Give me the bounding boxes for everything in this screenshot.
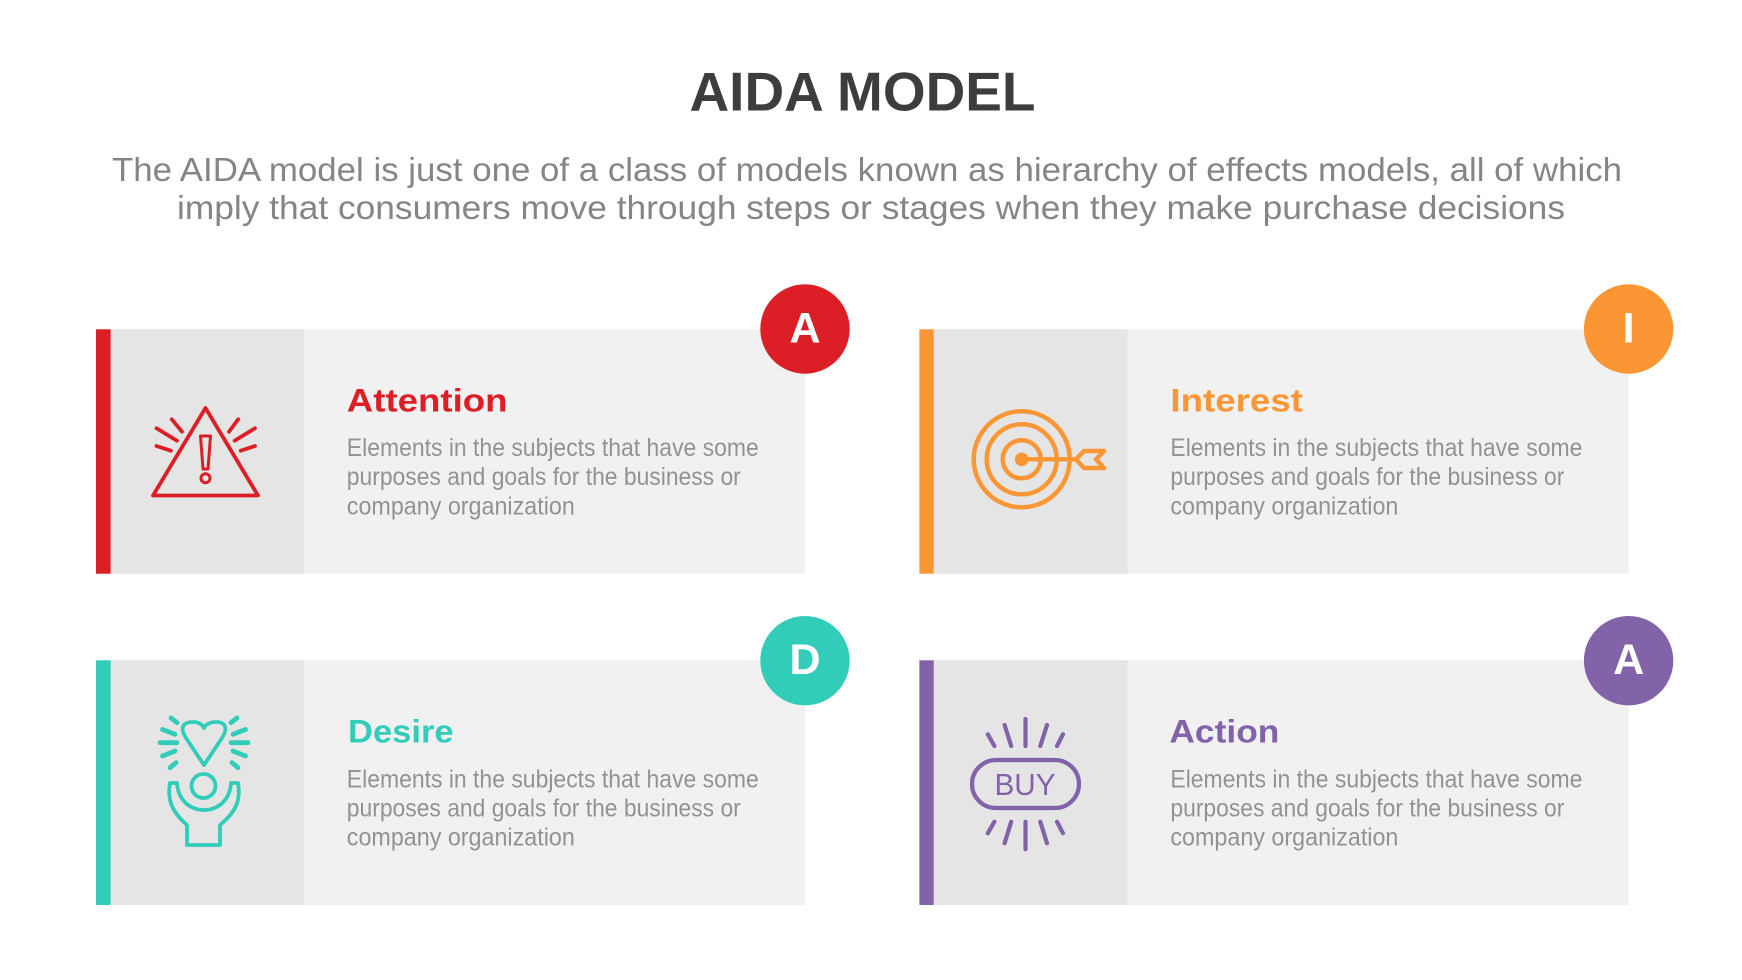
badge: D: D <box>789 636 821 684</box>
panel: attention <box>96 284 850 574</box>
badge: A <box>1584 616 1673 705</box>
heading: action: Action <box>1169 714 1279 750</box>
subtitle: imply that consumers move through steps or stages when they make purchase decisions <box>177 189 1565 226</box>
icon: target with arrow <box>974 411 1104 507</box>
description: interest: purposes and goals for the business or <box>1170 463 1564 491</box>
icon: warning triangle <box>153 408 258 496</box>
icon: buy button: BUY <box>994 767 1056 802</box>
badge: A: A <box>1613 636 1644 684</box>
description: action: purposes and goals for the business or <box>1170 794 1564 822</box>
heading: attention: Attention <box>347 382 508 418</box>
description: desire <box>347 765 759 852</box>
heading: desire: Desire <box>348 714 454 750</box>
description: action <box>1170 765 1582 852</box>
description: interest <box>1170 434 1582 520</box>
description: action: company organization <box>1170 824 1398 852</box>
heading: interest: Interest <box>1170 382 1303 418</box>
description: desire: Elements in the subjects that have some <box>347 765 759 793</box>
badge: A: A <box>789 304 821 352</box>
badge: I <box>1584 284 1673 374</box>
description: desire: purposes and goals for the business or <box>347 794 741 822</box>
badge: D <box>760 616 850 705</box>
title: AIDA MODEL <box>690 61 1036 123</box>
description: action: Elements in the subjects that have some <box>1170 765 1582 793</box>
description: interest: company organization <box>1170 492 1398 520</box>
subtitle <box>112 151 1622 226</box>
panel: desire <box>96 616 850 905</box>
description: desire: company organization <box>347 824 575 852</box>
icon: buy button <box>972 719 1079 849</box>
description: attention: Elements in the subjects that have some <box>347 434 759 462</box>
icon: hands holding heart <box>160 718 248 845</box>
description: interest: Elements in the subjects that have some <box>1170 434 1582 462</box>
description: attention: company organization <box>347 492 575 520</box>
subtitle: The AIDA model is just one of a class of models known as hierarchy of effects models, all of which <box>112 151 1622 188</box>
panel: action <box>919 616 1673 905</box>
panel: interest <box>919 284 1673 574</box>
badge: A <box>760 284 850 374</box>
description: attention: purposes and goals for the business or <box>347 463 741 491</box>
description: attention <box>347 434 759 520</box>
badge: I: I <box>1623 304 1635 352</box>
